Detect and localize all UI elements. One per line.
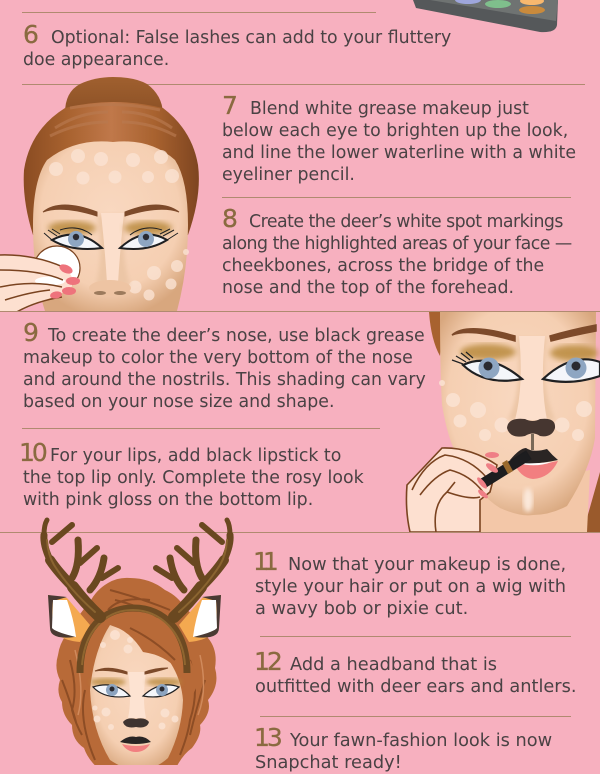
step 10 text: with pink gloss on the bottom lip.	[23, 490, 313, 510]
step 8 text	[222, 204, 572, 298]
ears	[48, 595, 90, 642]
illustration: face with cotton pad	[0, 77, 199, 318]
step 10 text: For your lips, add black lipstick to	[50, 446, 341, 466]
step 7 text: below each eye to brighten up the look,	[222, 121, 568, 141]
lips	[513, 461, 558, 479]
step 11 text: 11	[253, 547, 273, 576]
step 9 text: and around the nostrils. This shading can vary	[23, 370, 426, 390]
step 11 text: style your hair or put on a wig with	[255, 577, 566, 597]
illustration: face with lipstick	[406, 312, 600, 532]
step 9 text: makeup to color the very bottom of the nose	[23, 348, 413, 368]
antlers	[44, 520, 230, 617]
step 8 text: cheekbones, across the bridge of the	[222, 256, 544, 276]
step 13 text: 13	[254, 723, 280, 752]
nose contour	[96, 215, 130, 285]
step 9 text: based on your nose size and shape.	[23, 392, 334, 412]
step 6 text: 6	[23, 20, 36, 49]
step 11 text: Now that your makeup is done,	[288, 555, 566, 575]
headband	[80, 608, 187, 673]
brows	[43, 205, 97, 216]
illustration: finished deer look	[44, 520, 230, 770]
hand with cotton pad	[0, 246, 80, 318]
step 7 text: eyeliner pencil.	[222, 165, 355, 185]
step 7 text: 7	[222, 91, 235, 120]
step 9 text: 9	[23, 318, 36, 347]
step 8 text: 8	[222, 204, 235, 233]
eyes	[52, 235, 102, 249]
step 11 text: a wavy bob or pixie cut.	[255, 599, 468, 619]
step 12 text	[254, 647, 576, 697]
step 7 text	[222, 91, 576, 185]
step 12 text: Add a headband that is	[290, 655, 497, 675]
step 9 text	[23, 318, 426, 412]
step 11 text	[253, 547, 566, 619]
step 6 text: doe appearance.	[23, 50, 169, 70]
hand holding lipstick	[406, 448, 531, 532]
step 7 text: and line the lower waterline with a white	[222, 143, 576, 163]
step 9 text: To create the deer’s nose, use black grease	[48, 326, 425, 346]
step 8 text: along the highlighted areas of your face —	[222, 234, 572, 254]
step 12 text: outfitted with deer ears and antlers.	[255, 677, 576, 697]
step 6 text	[23, 20, 451, 70]
deer nose	[507, 419, 555, 437]
step 10 text	[19, 438, 364, 510]
step 13 text: Snapchat ready!	[255, 753, 402, 773]
step 12 text: 12	[254, 647, 280, 676]
eyeshadow	[48, 221, 96, 235]
step 13 text	[254, 723, 552, 773]
step 10 text: the top lip only. Complete the rosy look	[23, 468, 364, 488]
icon: makeup palette	[413, 0, 558, 32]
step 10 text: 10	[19, 438, 45, 467]
step 8 text: Create the deer’s white spot markings	[249, 212, 563, 232]
step 13 text: Your fawn-fashion look is now	[290, 731, 552, 751]
step 6 text: Optional: False lashes can add to your fluttery	[51, 28, 451, 48]
step 7 text: Blend white grease makeup just	[250, 99, 529, 119]
face spots	[49, 149, 189, 300]
step 8 text: nose and the top of the forehead.	[222, 278, 514, 298]
